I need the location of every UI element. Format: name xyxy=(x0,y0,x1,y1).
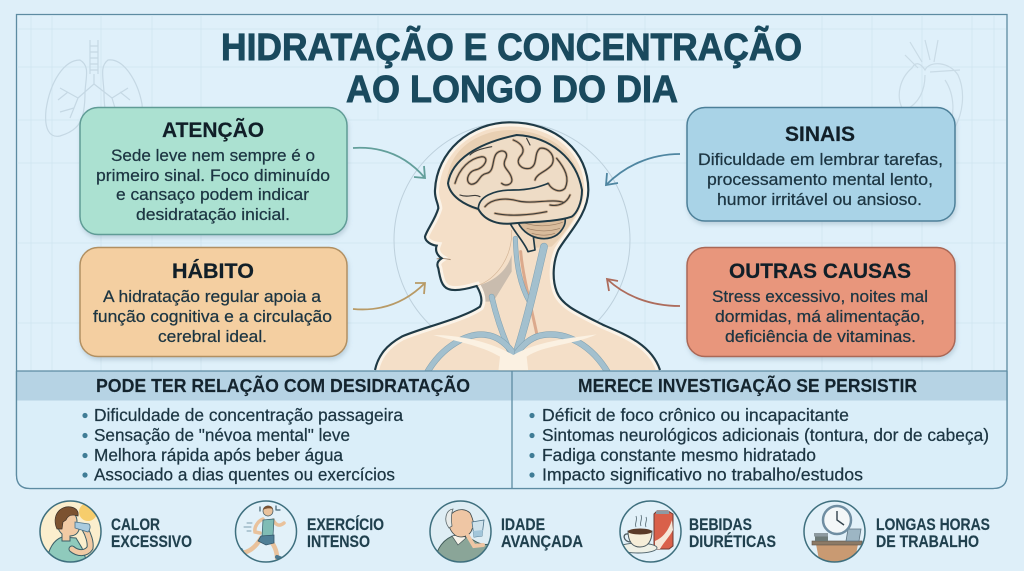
label: calor excessivo: CALOR xyxy=(111,516,160,534)
list: merece investigação: Sintomas neurológicos adicionais (tontura, dor de cabeça) xyxy=(542,425,989,445)
title: AO LONGO DO DIA xyxy=(346,69,678,111)
text: atenção body: e cansaço podem indicar xyxy=(116,185,309,204)
text: atenção body: desidratação inicial. xyxy=(136,205,290,224)
heading: atenção: ATENÇÃO xyxy=(162,117,264,142)
icon: bebidas diuréticas xyxy=(619,501,681,562)
icon: calor excessivo xyxy=(40,501,101,565)
text: hábito body: cerebral ideal. xyxy=(158,327,267,346)
text: sinais body xyxy=(698,150,943,209)
list: pode ter relação: Sensação de "névoa mental" leve xyxy=(94,425,350,445)
panel: atenção xyxy=(80,108,347,234)
list: pode ter relação: Dificuldade de concentração passageira xyxy=(94,405,403,425)
heading: pode ter relação: PODE TER RELAÇÃO COM DESIDRATAÇÃO xyxy=(96,375,470,396)
title xyxy=(221,25,802,111)
list: merece investigação: Fadiga constante mesmo hidratado xyxy=(542,445,816,465)
arrow: hábito to head xyxy=(353,283,425,309)
heading: sinais: SINAIS xyxy=(785,122,855,146)
label: exercício intenso: INTENSO xyxy=(307,533,370,551)
label: calor excessivo: EXCESSIVO xyxy=(111,533,192,551)
label: longas horas de trabalho: LONGAS HORAS xyxy=(876,516,990,534)
icon: exercício intenso xyxy=(236,501,296,562)
text: atenção body xyxy=(96,146,330,224)
label: longas horas de trabalho xyxy=(876,516,990,551)
text: sinais body: Dificuldade em lembrar tarefas, xyxy=(698,150,943,169)
icon: idade avançada xyxy=(430,501,495,565)
concentric guide circle xyxy=(394,122,630,358)
list: merece investigação: Impacto significativo no trabalho/estudos xyxy=(542,464,863,484)
label: bebidas diuréticas xyxy=(689,516,776,551)
list: merece investigação xyxy=(529,405,989,484)
text: atenção body: primeiro sinal. Foco diminuído xyxy=(96,166,330,185)
label: exercício intenso: EXERCÍCIO xyxy=(307,515,384,534)
watermark icon: heart xyxy=(899,40,963,136)
heading: merece investigação: MERECE INVESTIGAÇÃO SE PERSISTIR xyxy=(578,375,917,396)
label: calor excessivo xyxy=(111,516,192,551)
label: bebidas diuréticas: DIURÉTICAS xyxy=(689,532,776,551)
label: idade avançada: AVANÇADA xyxy=(501,533,583,551)
watermark icon: lungs xyxy=(46,40,142,136)
label: idade avançada xyxy=(501,516,583,551)
panel: hábito xyxy=(80,248,347,356)
label: exercício intenso xyxy=(307,515,384,551)
text: hábito body xyxy=(93,287,332,346)
heading: outras causas: OUTRAS CAUSAS xyxy=(729,259,911,283)
carotid and jugular vessels xyxy=(427,238,608,373)
text: outras causas body xyxy=(712,287,928,346)
text: sinais body: processamento mental lento, xyxy=(707,170,933,189)
panel: sinais xyxy=(687,108,955,221)
illustration: head and brain xyxy=(375,122,660,373)
comparison table xyxy=(16,371,1007,488)
text: hábito body: A hidratação regular apoia a xyxy=(103,287,322,306)
heading: hábito: HÁBITO xyxy=(172,258,254,283)
text: hábito body: função cognitiva e a circulação xyxy=(93,307,332,326)
icon: longas horas de trabalho xyxy=(804,501,865,565)
list: pode ter relação: Associado a dias quentes ou exercícios xyxy=(94,464,395,484)
arrow: outras causas to head xyxy=(607,279,680,306)
text: outras causas body: Stress excessivo, noites mal xyxy=(712,287,928,306)
text: sinais body: humor irritável ou ansioso. xyxy=(717,190,922,209)
label: idade avançada: IDADE xyxy=(501,516,545,534)
text: outras causas body: deficiência de vitaminas. xyxy=(725,327,916,346)
label: bebidas diuréticas: BEBIDAS xyxy=(689,516,752,534)
text: outras causas body: dormidas, má alimentação, xyxy=(715,307,925,326)
text: atenção body: Sede leve nem sempre é o xyxy=(111,146,315,165)
panel: outras causas xyxy=(687,248,955,356)
arrow: atenção to brain xyxy=(353,148,425,178)
list: pode ter relação: Melhora rápida após beber água xyxy=(94,445,343,465)
label: longas horas de trabalho: DE TRABALHO xyxy=(876,533,979,551)
list: merece investigação: Déficit de foco crônico ou incapacitante xyxy=(542,405,849,425)
arrow: sinais to brain xyxy=(606,154,680,185)
title: HIDRATAÇÃO E CONCENTRAÇÃO xyxy=(221,25,802,69)
list: pode ter relação xyxy=(82,405,403,484)
